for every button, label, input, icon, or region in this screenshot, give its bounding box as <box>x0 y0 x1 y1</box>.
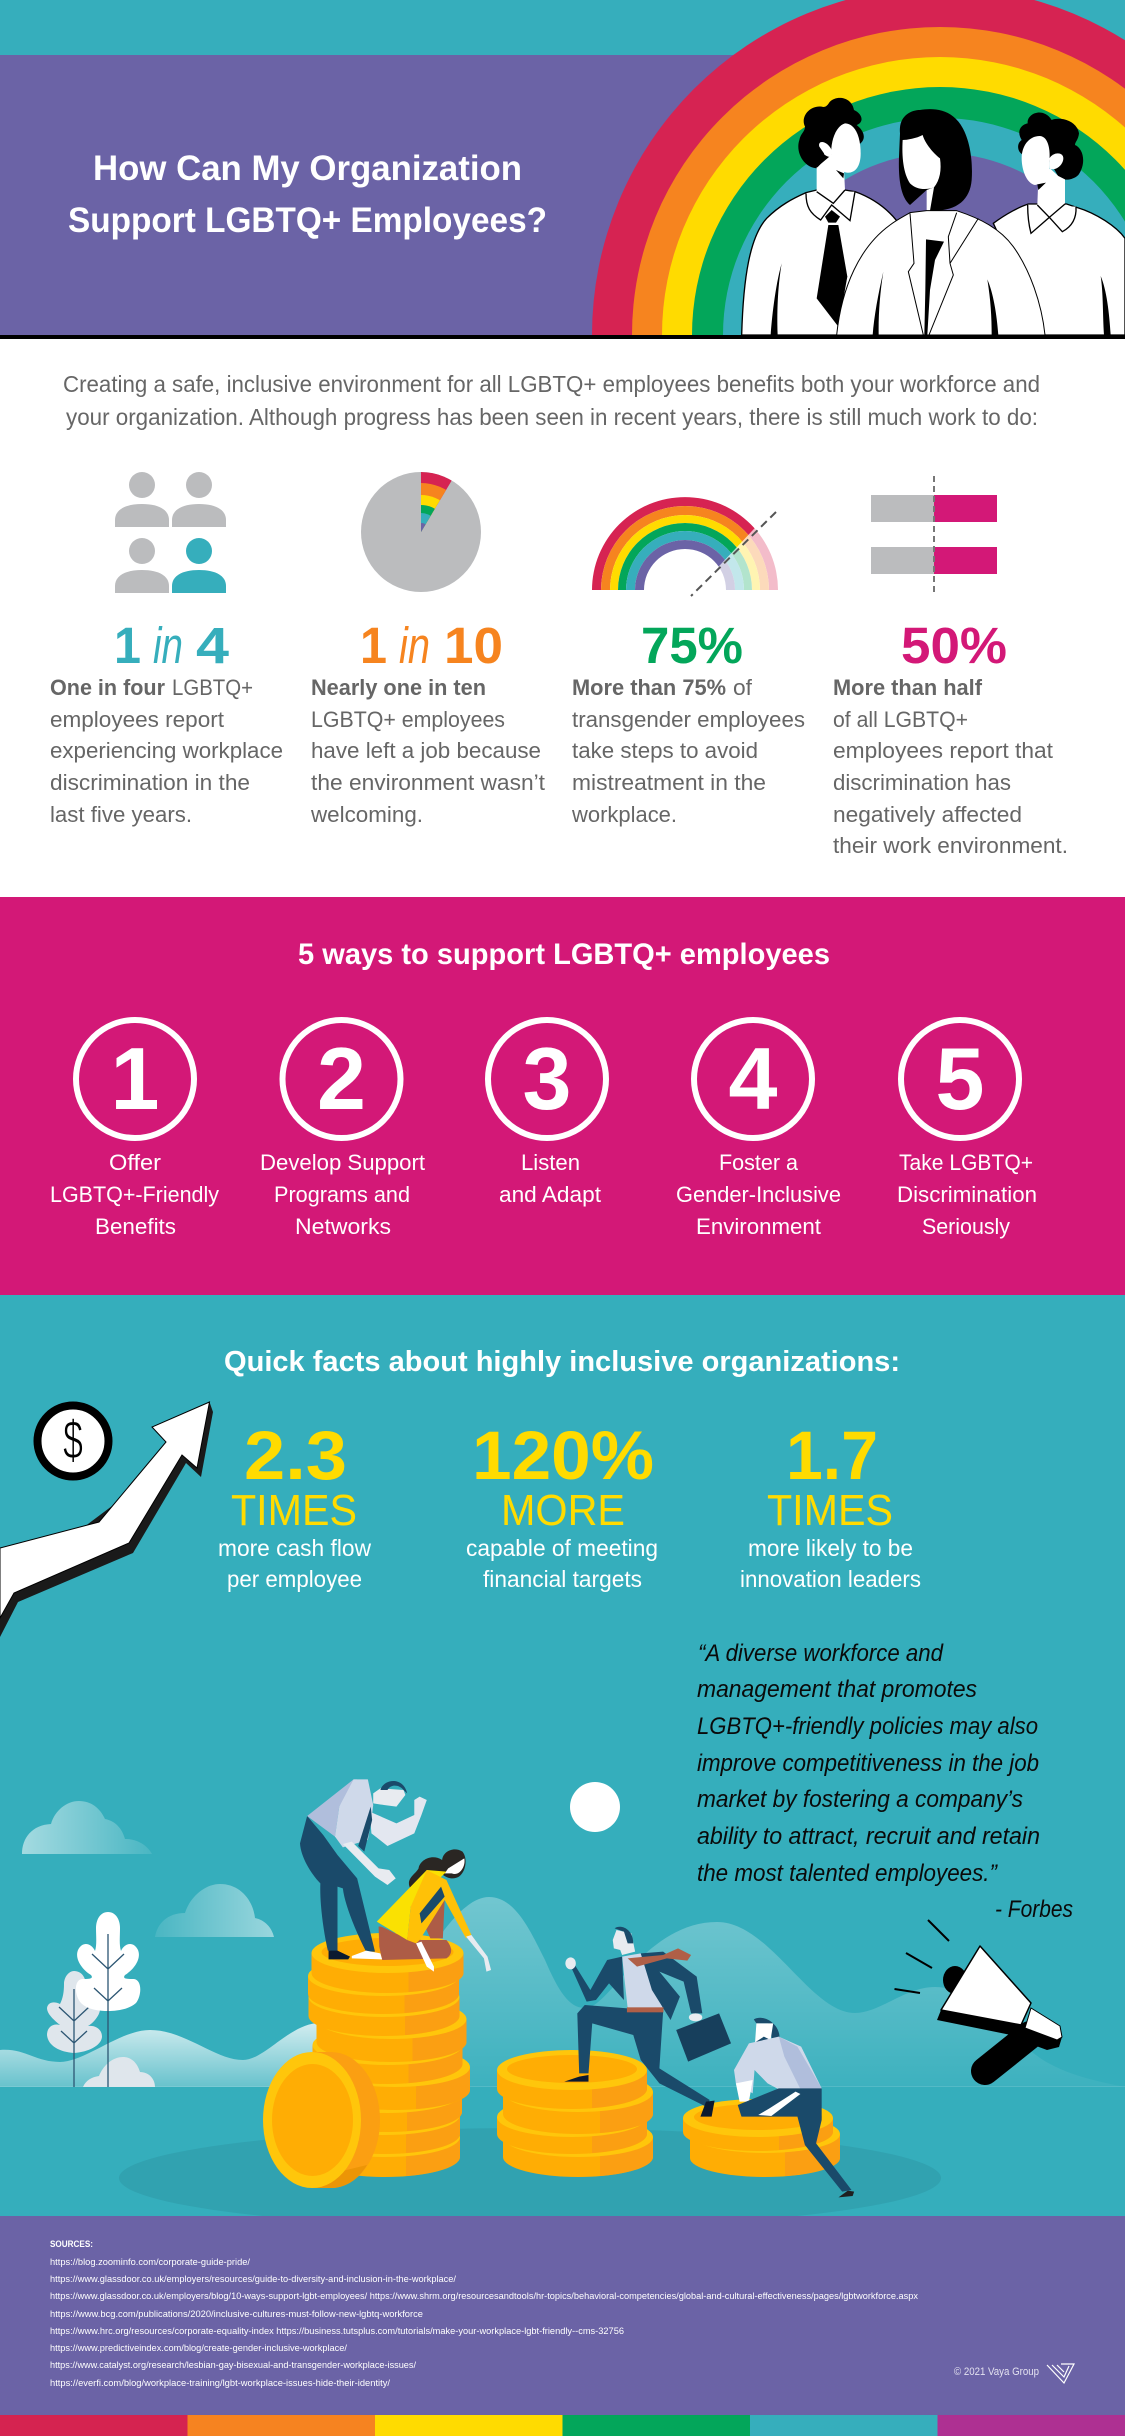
heading: quick facts: Quick facts about highly inclusive organizations: <box>224 1346 900 1378</box>
panel: quick facts <box>0 1295 1125 2228</box>
panel: header <box>0 0 1125 339</box>
icon: cloud left <box>22 1801 152 1854</box>
step 1: Offer <box>109 1150 161 1175</box>
person: left man <box>742 98 903 335</box>
stat: 120% more: capable of meeting <box>466 1535 658 1561</box>
step 1 <box>50 1020 219 1239</box>
icon: back tree <box>47 1971 102 2087</box>
quote: improve competitiveness in the job <box>697 1750 1039 1777</box>
person: right man <box>993 113 1125 335</box>
sources: SOURCES: <box>50 2239 93 2250</box>
stat: 1 in 10: 10 <box>444 617 503 674</box>
stat: 120% more: MORE <box>501 1486 625 1535</box>
intro text: Creating a safe, inclusive environment for all LGBTQ+ employees benefits both your workforce and <box>63 371 1040 397</box>
stat: 120% more <box>466 1417 658 1592</box>
text block: more than half: of all LGBTQ+ <box>833 707 968 732</box>
step 5: 5 <box>936 1029 984 1128</box>
text block: one in four: last five years. <box>50 802 192 827</box>
person: centre woman <box>837 109 1045 335</box>
title <box>68 149 547 240</box>
text block: more than 75%: take steps to avoid <box>572 738 758 763</box>
text block: one in ten: have left a job because <box>311 738 541 763</box>
icon: megaphone <box>894 1920 1062 2071</box>
stat: 120% more: financial targets <box>483 1566 642 1592</box>
text block: more than 75%: mistreatment in the <box>572 770 766 795</box>
text block: more than half: negatively affected <box>833 802 1022 827</box>
quote: ability to attract, recruit and retain <box>697 1823 1040 1850</box>
text block: more than half: More than half <box>833 675 983 700</box>
sources: https://www.glassdoor.co.uk/employers/resources/guide-to-diversity-and-inclusion-in-the-workplace/ <box>50 2274 456 2285</box>
intro text <box>63 371 1040 430</box>
stat: 120% more: 120% <box>472 1417 654 1494</box>
icon: sun <box>570 1782 620 1832</box>
quote: market by fostering a company’s <box>697 1786 1023 1813</box>
illustration: front coin <box>263 2052 380 2188</box>
step 5 <box>897 1020 1037 1239</box>
text block: one in four <box>50 675 283 827</box>
text block: one in four: employees report <box>50 707 224 732</box>
step 2: Develop Support <box>260 1150 425 1175</box>
stat: 2.3 times <box>218 1417 371 1592</box>
text block: more than 75%: More than 75% <box>572 675 726 700</box>
step 2: 2 <box>317 1029 366 1128</box>
step 5: Discrimination <box>897 1182 1037 1207</box>
step 4: Gender-Inclusive <box>676 1182 841 1207</box>
panel: five ways <box>0 897 1125 1295</box>
stat: 2.3 times: 2.3 <box>244 1417 347 1494</box>
text block: more than half: their work environment. <box>833 833 1068 858</box>
step 1: LGBTQ+-Friendly <box>50 1182 219 1207</box>
icon: people one in four <box>115 472 226 593</box>
illustration: seated man <box>734 2018 854 2197</box>
rainbow arch <box>592 0 1125 335</box>
panel: statistics <box>50 375 1066 853</box>
rainbow footer stripes <box>0 2415 1125 2436</box>
title: Support LGBTQ+ Employees? <box>68 201 547 240</box>
stat: 1.7 times <box>740 1417 921 1592</box>
text block: more than 75% <box>571 675 805 827</box>
stat: 1.7 times: innovation leaders <box>740 1566 921 1592</box>
step 5: Seriously <box>922 1214 1010 1239</box>
step 1: 1 <box>111 1029 159 1128</box>
stat: 1 in 4: 4 <box>196 617 230 674</box>
step 2 <box>260 1020 425 1239</box>
icon: dollar coin <box>38 1406 108 1476</box>
text block: more than half: employees report that <box>833 738 1053 763</box>
stat: 1 in 4 <box>114 617 230 674</box>
step 4 <box>676 1020 841 1239</box>
text block: more than 75%: transgender employees <box>572 707 805 732</box>
icon: rainbow three quarters <box>592 497 778 596</box>
text block: one in four: LGBTQ+ <box>172 675 253 700</box>
icon: pie chart one in ten <box>361 472 481 592</box>
text block: more than 75%: workplace. <box>571 802 677 827</box>
illustration: landscape <box>0 1897 1125 2228</box>
sources: https://www.glassdoor.co.uk/employers/blog/10-ways-support-lgbt-employees/ https://www.shrm.org/resourcesandtools/hr-topics/behavioral-competencies/global-and-cultural-effectiveness/pages/lgbtworkforce.aspx <box>50 2291 918 2302</box>
illustration: man leaning over <box>300 1779 427 1959</box>
sources: https://blog.zoominfo.com/corporate-guide-pride/ <box>50 2257 250 2268</box>
heading: five ways: 5 ways to support LGBTQ+ employees <box>298 938 830 971</box>
icon: front tree <box>76 1912 140 2087</box>
sources: https://everfi.com/blog/workplace-training/lgbt-workplace-issues-hide-their-identity/ <box>50 2378 390 2389</box>
text block: one in four: experiencing workplace <box>50 738 283 763</box>
quote: LGBTQ+-friendly policies may also <box>697 1713 1038 1740</box>
icon: cloud centre <box>155 1884 274 1937</box>
quote: - Forbes <box>995 1896 1073 1923</box>
text block: one in ten: the environment wasn’t <box>311 770 545 795</box>
stat: 75%: 75% <box>641 617 743 674</box>
step 3: Listen <box>521 1150 580 1175</box>
stat: 1 in 4: 1 <box>114 617 141 674</box>
sources: https://www.catalyst.org/research/lesbian-gay-bisexual-and-transgender-workplace-issues/ <box>50 2360 416 2371</box>
illustration: right coin stack <box>683 2099 840 2177</box>
sources <box>50 2239 918 2389</box>
illustration: tall coin stack <box>308 1933 470 2177</box>
text block: more than half <box>833 675 1068 858</box>
icon: Vaya logo <box>1047 2364 1074 2383</box>
sources: https://www.hrc.org/resources/corporate-equality-index https://business.tutsplus.com/tutorials/make-your-workplace-lgbt-friendly--cms-32756 <box>50 2326 624 2337</box>
intro text: your organization. Although progress has been seen in recent years, there is still much work to do: <box>66 404 1038 430</box>
stat: 1 in 10: 1 <box>360 617 387 674</box>
stat: 1.7 times: TIMES <box>767 1486 893 1535</box>
step 2: Programs and <box>274 1182 410 1207</box>
text block: more than half: discrimination has <box>833 770 1011 795</box>
step 4: 4 <box>729 1029 778 1128</box>
step 2: Networks <box>295 1214 391 1239</box>
text block: more than 75%: of <box>733 675 753 700</box>
stat: 1 in 4: in <box>153 617 183 674</box>
sources: https://www.predictiveindex.com/blog/create-gender-inclusive-workplace/ <box>50 2343 347 2354</box>
text block: one in ten: welcoming. <box>310 802 423 827</box>
quote <box>697 1640 1073 1923</box>
quote: the most talented employees.” <box>697 1860 998 1887</box>
sources: https://www.bcg.com/publications/2020/inclusive-cultures-must-follow-new-lgbtq-workforce <box>50 2309 423 2320</box>
step 3: and Adapt <box>499 1182 601 1207</box>
step 4: Foster a <box>719 1150 799 1175</box>
step 5: Take LGBTQ+ <box>899 1150 1033 1175</box>
step 1: Benefits <box>95 1214 176 1239</box>
illustration: running man <box>564 1927 731 2117</box>
text block: one in four: One in four <box>50 675 165 700</box>
text block: one in ten: LGBTQ+ employees <box>311 707 505 732</box>
icon: dollar coin: $ <box>63 1409 83 1471</box>
panel: footer <box>0 2216 1125 2436</box>
icon: small cloud <box>83 2057 155 2087</box>
stat: 1.7 times: 1.7 <box>786 1417 878 1494</box>
quote: “A diverse workforce and <box>698 1640 944 1667</box>
stat: 2.3 times: more cash flow <box>218 1535 371 1561</box>
icon: rising arrow <box>0 1402 213 1637</box>
title: How Can My Organization <box>93 149 522 188</box>
step 3 <box>488 1020 606 1207</box>
icon: half bars <box>871 476 997 593</box>
stat: 1 in 10: in <box>399 617 430 674</box>
text block: one in ten: Nearly one in ten <box>311 675 486 700</box>
stat: 2.3 times: per employee <box>227 1566 362 1592</box>
stat: 2.3 times: TIMES <box>231 1486 357 1535</box>
illustration: middle coin stack <box>497 2050 653 2177</box>
stat: 1.7 times: more likely to be <box>748 1535 913 1561</box>
illustration: kneeling woman <box>352 1849 491 1972</box>
text block: one in ten <box>310 675 545 827</box>
copyright: © 2021 Vaya Group <box>954 2366 1039 2378</box>
step 3: 3 <box>523 1029 571 1128</box>
stat: 1 in 10 <box>360 617 503 674</box>
illustration: three people <box>742 98 1125 335</box>
stat: 50%: 50% <box>901 617 1007 674</box>
text block: one in four: discrimination in the <box>50 770 250 795</box>
quote: management that promotes <box>697 1676 977 1703</box>
step 4: Environment <box>696 1214 821 1239</box>
